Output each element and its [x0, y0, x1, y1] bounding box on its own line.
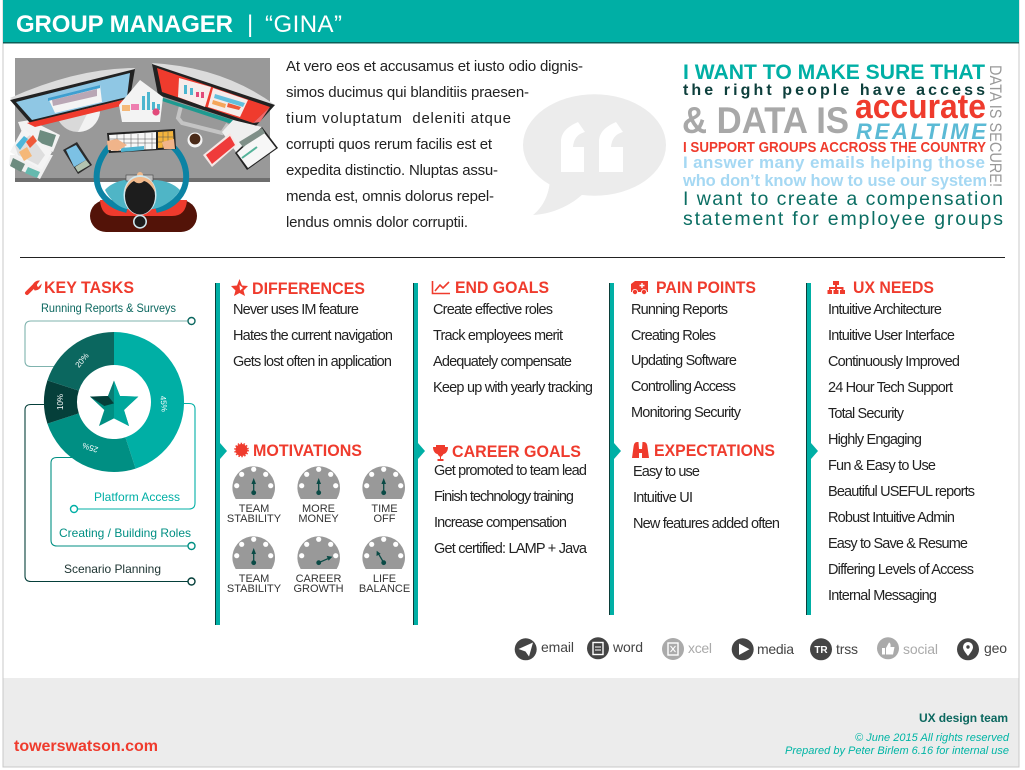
list: ux needs: Intuitive Architecture	[828, 302, 942, 318]
icon: burst	[235, 443, 248, 457]
list: end goals	[433, 302, 593, 396]
task labels: Running Reports & Surveys	[41, 301, 176, 315]
icon: star	[231, 279, 248, 296]
heading: differences: DIFFERENCES	[252, 279, 365, 298]
channel: media	[732, 638, 794, 660]
title: GROUP MANAGER	[16, 11, 233, 38]
channel: trss: TR	[814, 645, 828, 656]
gauge: more money	[297, 466, 340, 525]
gauge: life balance: LIFE	[373, 573, 396, 585]
donut chart: 25%	[81, 441, 99, 454]
list: differences	[233, 302, 393, 370]
footer prepared by: Prepared by Peter Birlem 6.16 for internal use	[785, 745, 1009, 757]
list: ux needs: Continuously Improved	[828, 354, 960, 370]
channel: media: media	[757, 641, 794, 657]
list: pain points: Controlling Access	[631, 379, 736, 395]
right monitor	[152, 63, 275, 131]
channel: trss: trss	[836, 641, 858, 657]
quote word cloud: I answer many emails helping those	[683, 153, 985, 172]
list: career goals: Get promoted to team lead	[434, 463, 587, 479]
task labels	[41, 301, 191, 576]
channel: xcel: xcel	[688, 640, 712, 656]
footer team credit: UX design team	[919, 711, 1008, 725]
gauge: team stability: TEAM	[239, 503, 269, 515]
task labels: Creating / Building Roles	[59, 526, 191, 540]
gauge: team stability: STABILITY	[227, 513, 282, 525]
list: expectations: New features added often	[633, 516, 780, 532]
quote word cloud	[682, 61, 1005, 230]
column divider with arrow 1	[215, 283, 227, 625]
list: pain points: Creating Roles	[631, 328, 716, 344]
gauge: team stability second: TEAM	[239, 573, 269, 585]
list: ux needs: Total Security	[828, 406, 905, 422]
list: ux needs: Easy to Save & Resume	[828, 536, 968, 552]
title separator: |	[247, 11, 253, 38]
icon: sitemap	[828, 281, 845, 294]
donut chart	[44, 332, 184, 472]
channel: xcel	[662, 638, 712, 660]
quote word cloud: statement for employee groups	[683, 208, 1003, 230]
channel: email	[515, 638, 574, 660]
notebook and red phone	[203, 120, 278, 170]
gauge: life balance	[359, 536, 410, 595]
task labels: Platform Access	[94, 490, 180, 504]
gauge: team stability	[227, 466, 282, 525]
channel: social	[877, 637, 938, 659]
list: pain points: Updating Software	[631, 353, 737, 369]
list: end goals: Adequately compensate	[433, 354, 572, 370]
person arms and body	[97, 146, 186, 210]
channel: email: email	[541, 639, 574, 655]
left monitor	[10, 68, 135, 127]
head	[124, 175, 156, 229]
quote word cloud: DATA IS SECURE!	[986, 65, 1005, 187]
list: career goals	[434, 463, 588, 557]
gauge: time off: TIME	[371, 503, 398, 515]
panel: end goals	[432, 278, 593, 396]
gauge: team stability second: STABILITY	[227, 583, 282, 595]
list: expectations	[633, 464, 780, 532]
list: differences: Hates the current navigation	[233, 328, 393, 344]
icon: wrench	[27, 281, 41, 293]
persona name: “GINA”	[265, 11, 342, 38]
gauge: team stability second	[227, 536, 282, 595]
channel: word: word	[612, 639, 643, 655]
column divider with arrow 4	[806, 283, 818, 615]
list: ux needs: Robust Intuitive Admin	[828, 510, 955, 526]
channel: geo	[957, 638, 1007, 660]
column divider with arrow 2	[413, 283, 425, 625]
leader lines	[25, 321, 195, 582]
panel: differences	[231, 279, 393, 370]
icon: binoculars	[632, 442, 649, 458]
quote word cloud: I want to create a compensation	[683, 188, 1003, 210]
intro paragraph: simos ducimus qui blanditiis praesen-	[286, 84, 529, 101]
gauge: time off: OFF	[374, 513, 396, 525]
list: ux needs: Intuitive User Interface	[828, 328, 955, 344]
list: end goals: Create effective roles	[433, 302, 553, 318]
leader end dots	[70, 318, 195, 585]
quote word cloud: accurate	[855, 88, 986, 126]
list: ux needs: Differing Levels of Access	[828, 562, 974, 578]
heading: motivations: MOTIVATIONS	[253, 441, 362, 460]
keyboard	[107, 129, 176, 153]
task labels: Scenario Planning	[64, 562, 161, 576]
heading: key tasks: KEY TASKS	[44, 278, 134, 297]
quote word cloud: I WANT TO MAKE SURE THAT	[683, 61, 985, 84]
icon: trophy	[433, 445, 448, 461]
left paper stack	[9, 120, 60, 179]
list: differences: Gets lost often in application	[233, 354, 392, 370]
gauge: career growth	[293, 536, 344, 595]
gauge: time off	[362, 466, 405, 525]
intro paragraph: corrupti quos rerum facilis est et	[286, 136, 493, 153]
list: ux needs	[828, 302, 975, 604]
intro paragraph: tium voluptatum deleniti atque	[286, 110, 511, 127]
gauge: life balance: BALANCE	[359, 583, 410, 595]
donut chart: 20%	[73, 351, 91, 369]
panel: ux needs	[828, 278, 975, 604]
chart paper	[119, 80, 163, 122]
heading: end goals: END GOALS	[455, 278, 549, 297]
list: ux needs: Beautiful USEFUL reports	[828, 484, 975, 500]
title bar	[3, 0, 1019, 44]
list: end goals: Keep up with yearly tracking	[433, 380, 593, 396]
panel: key tasks	[25, 278, 195, 585]
list: expectations: Easy to use	[633, 464, 700, 480]
icon: line chart	[432, 281, 450, 294]
list: ux needs: Fun & Easy to Use	[828, 458, 936, 474]
column divider with arrow 3	[609, 283, 621, 615]
heading: career goals: CAREER GOALS	[452, 442, 581, 461]
footer brand: towerswatson.com	[14, 738, 158, 755]
quote word cloud: & DATA IS	[682, 100, 849, 141]
heading: ux needs: UX NEEDS	[853, 278, 934, 297]
channel legend	[515, 637, 1007, 660]
gauge: career growth: CAREER	[296, 573, 341, 585]
illustration: person at desk with two monitors	[9, 58, 278, 232]
intro paragraph: At vero eos et accusamus et iusto odio dignis-	[286, 58, 583, 75]
icon: star	[90, 381, 138, 426]
intro paragraph	[286, 58, 583, 231]
right monitor stand	[178, 106, 228, 133]
intro paragraph: menda est, omnis dolorus repel-	[286, 188, 494, 205]
list: ux needs: Highly Engaging	[828, 432, 922, 448]
list: end goals: Track employees merit	[433, 328, 563, 344]
list: career goals: Get certified: LAMP + Java	[434, 541, 588, 557]
intro paragraph: expedita distinctio. Nluptas assu-	[286, 162, 498, 179]
tablet	[63, 142, 92, 174]
gauge: more money: MONEY	[298, 513, 339, 525]
footer copyright: © June 2015 All rights reserved	[855, 732, 1010, 744]
donut chart: 10%	[56, 394, 65, 410]
panel: career goals	[433, 442, 588, 557]
heading: expectations: EXPECTATIONS	[654, 441, 775, 460]
gauge: career growth: GROWTH	[293, 583, 344, 595]
icon: quote speech bubble	[523, 94, 666, 215]
quote word cloud: the right people have access	[683, 82, 985, 99]
quote word cloud: REALTIME	[856, 119, 987, 144]
quote word cloud: who don’t know how to use our system	[682, 172, 987, 190]
icon: ambulance	[631, 281, 648, 295]
channel: trss	[810, 638, 858, 660]
list: pain points: Monitoring Security	[631, 405, 742, 421]
chair	[90, 200, 197, 232]
channel: social: social	[903, 641, 938, 657]
channel: word	[587, 637, 643, 659]
list: ux needs: Internal Messaging	[828, 588, 937, 604]
panel: expectations	[632, 441, 780, 532]
donut chart: 45%	[158, 395, 169, 412]
intro paragraph: lendus omnis dolor corruptii.	[286, 214, 468, 231]
coffee cup	[188, 132, 202, 148]
channel: geo: geo	[984, 640, 1007, 656]
gauge: more money: MORE	[302, 503, 335, 515]
quote word cloud: I SUPPORT GROUPS ACCROSS THE COUNTRY	[683, 139, 986, 156]
panel: motivations	[227, 441, 410, 595]
left monitor stand	[56, 88, 100, 132]
heading: pain points: PAIN POINTS	[656, 278, 756, 297]
list: pain points: Running Reports	[631, 302, 728, 318]
list: expectations: Intuitive UI	[633, 490, 693, 506]
list: career goals: Finish technology training	[434, 489, 574, 505]
list: ux needs: 24 Hour Tech Support	[828, 380, 953, 396]
list: differences: Never uses IM feature	[233, 302, 359, 318]
list: career goals: Increase compensation	[434, 515, 567, 531]
panel: pain points	[631, 278, 756, 421]
list: pain points	[631, 302, 742, 421]
